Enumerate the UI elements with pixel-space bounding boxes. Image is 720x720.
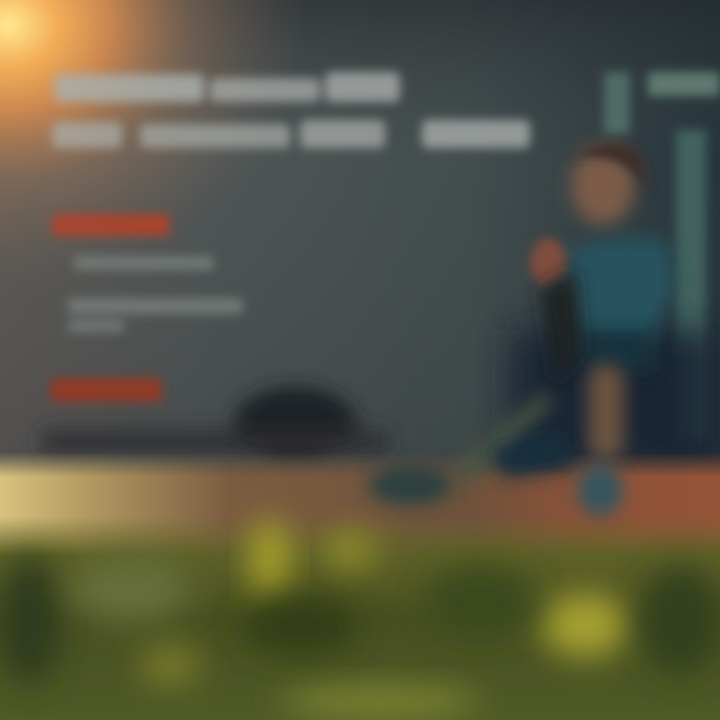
heading: red label one xyxy=(52,214,170,236)
head xyxy=(571,145,635,225)
arm xyxy=(530,238,566,286)
leg xyxy=(588,365,624,460)
wall background xyxy=(0,0,720,530)
post structure at right xyxy=(604,72,720,440)
green base xyxy=(0,518,720,720)
green foreground xyxy=(0,518,720,718)
hair xyxy=(572,144,652,195)
sun glow xyxy=(0,0,420,360)
figure: extended leg and stick xyxy=(368,392,575,505)
ground band xyxy=(0,452,720,556)
text block: blurred description xyxy=(68,256,243,332)
dark mound xyxy=(40,387,390,463)
shoe xyxy=(578,464,622,516)
dark sleeve xyxy=(540,270,582,385)
figure: child xyxy=(530,144,676,516)
heading: red label two xyxy=(50,378,162,402)
dark backdrop near figure xyxy=(510,330,720,470)
title: blurred headline xyxy=(52,72,530,148)
shorts xyxy=(572,330,656,372)
shirt xyxy=(565,238,676,345)
